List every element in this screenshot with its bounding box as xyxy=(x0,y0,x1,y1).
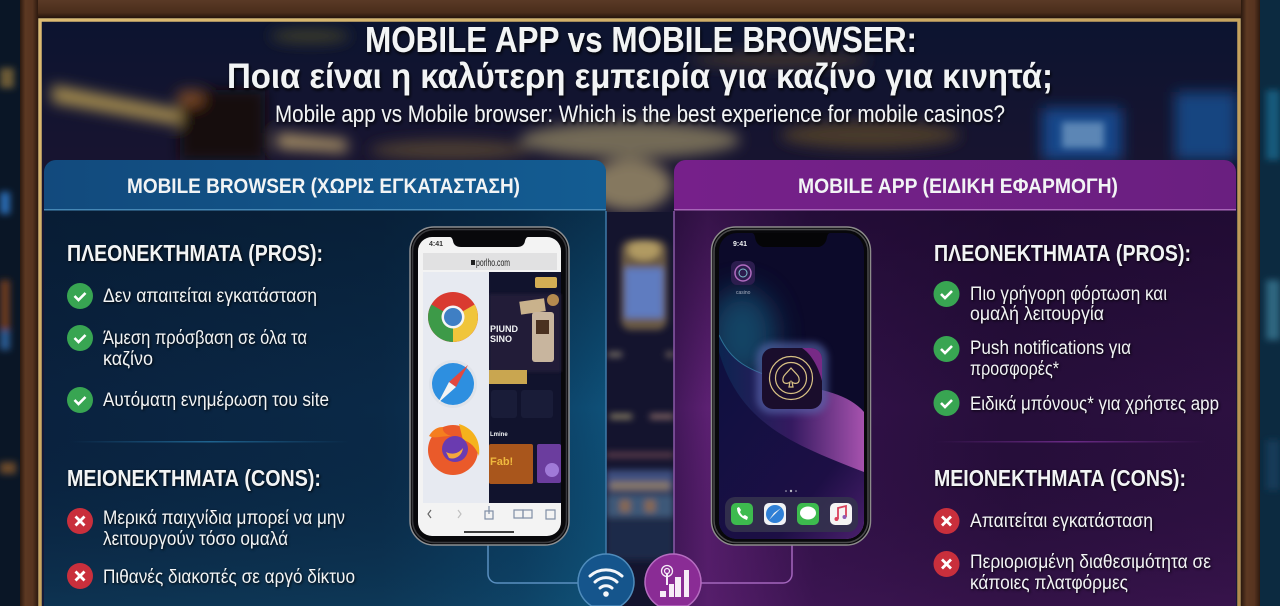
heading: browser pros: ΠΛΕΟΝΕΚΤΗΜΑΤΑ (PROS): xyxy=(67,240,323,266)
casino site screenshot xyxy=(489,272,561,503)
panel header: mobile app: MOBILE APP (ΕΙΔΙΚΗ ΕΦΑΡΜΟΓΗ) xyxy=(798,175,1118,198)
browser bottom toolbar xyxy=(428,506,555,532)
address bar xyxy=(423,253,557,270)
title line 2: Ποια είναι η καλύτερη εμπειρία για καζίνο για κινητά; xyxy=(227,57,1053,96)
pro item 3 xyxy=(67,387,329,413)
phone wallpaper xyxy=(708,233,864,539)
pro item 2 xyxy=(934,336,1131,380)
heading: app cons: ΜΕΙΟΝΕΚΤΗΜΑΤΑ (CONS): xyxy=(934,465,1186,491)
heading: app pros: ΠΛΕΟΝΕΚΤΗΜΑΤΑ (PROS): xyxy=(934,240,1191,266)
phone: mobile app xyxy=(708,227,870,545)
app icon: casino chip with spade xyxy=(756,342,828,414)
pro item 1 xyxy=(934,281,1167,325)
panel: mobile browser xyxy=(44,160,606,606)
badge: wifi xyxy=(578,554,634,606)
notch xyxy=(450,237,528,247)
casino site screenshot: Lmine xyxy=(490,432,508,438)
browser selection sidebar xyxy=(423,272,489,503)
con item 1 xyxy=(934,508,1153,534)
con item 1: λειτουργούν τόσο ομαλά xyxy=(103,529,288,550)
pro item 1: Δεν απαιτείται εγκατάσταση xyxy=(103,286,317,307)
app dock xyxy=(725,497,858,532)
icon: safari xyxy=(429,360,477,408)
panel header: mobile browser: MOBILE BROWSER (ΧΩΡΙΣ ΕΓΚΑΤΑΣΤΑΣΗ) xyxy=(127,175,520,198)
dock icon: phone xyxy=(731,503,753,525)
notch xyxy=(752,233,830,247)
con item 2: Περιορισμένη διαθεσιμότητα σε xyxy=(970,552,1211,573)
panel header: mobile app xyxy=(674,160,1236,210)
status bar text: 4:41 xyxy=(429,241,443,248)
small app icon: casino xyxy=(736,290,751,296)
small app icon xyxy=(731,261,755,296)
icon: chrome xyxy=(428,292,478,342)
pro item 3 xyxy=(934,390,1219,416)
pro item 3: Αυτόματη ενημέρωση του site xyxy=(103,390,329,411)
pro item 1 xyxy=(67,283,317,309)
con item 2 xyxy=(934,551,1211,594)
casino site screenshot: PIUND xyxy=(490,324,519,334)
con item 1: Απαιτείται εγκατάσταση xyxy=(970,511,1153,532)
heading: browser cons: ΜΕΙΟΝΕΚΤΗΜΑΤΑ (CONS): xyxy=(67,465,321,491)
main title xyxy=(227,19,1053,128)
panel header: mobile browser xyxy=(44,160,606,210)
phone: mobile browser xyxy=(410,227,569,545)
icon: firefox xyxy=(428,424,479,475)
pro item 1: ομαλή λειτουργία xyxy=(970,304,1104,325)
con item 2 xyxy=(67,563,355,589)
status time: 9:41 xyxy=(733,241,747,248)
casino site screenshot: SINO xyxy=(490,334,512,344)
con item 1: Μερικά παιχνίδια μπορεί να μην xyxy=(103,508,345,529)
page dots xyxy=(785,490,797,492)
pro item 3: Ειδικά μπόνους* για χρήστες app xyxy=(970,394,1219,415)
pro item 2: καζίνο xyxy=(103,349,153,370)
pro item 2: προσφορές* xyxy=(970,359,1060,380)
con item 2: κάποιες πλατφόρμες xyxy=(970,573,1128,594)
pro item 2: Άμεση πρόσβαση σε όλα τα xyxy=(103,328,307,349)
pro item 2 xyxy=(67,325,307,370)
con item 1 xyxy=(67,508,345,550)
panel: mobile app xyxy=(674,160,1236,606)
pro item 2: Push notifications για xyxy=(970,338,1131,359)
dock icon: safari xyxy=(764,503,786,525)
subtitle: Mobile app vs Mobile browser: Which is the best experience for mobile casinos? xyxy=(275,101,1005,128)
phone screen xyxy=(418,237,561,536)
address bar: porlho.com xyxy=(476,257,510,269)
title line 1: MOBILE APP vs MOBILE BROWSER: xyxy=(365,19,917,60)
pro item 1: Πιο γρήγορη φόρτωση και xyxy=(970,284,1167,305)
connector lines xyxy=(488,211,792,583)
dock icon: music xyxy=(830,503,852,525)
dock icon: messages xyxy=(797,503,819,525)
badge: mobile signal xyxy=(645,554,701,606)
con item 2: Πιθανές διακοπές σε αργό δίκτυο xyxy=(103,567,355,588)
casino site screenshot: Fab! xyxy=(490,456,513,468)
